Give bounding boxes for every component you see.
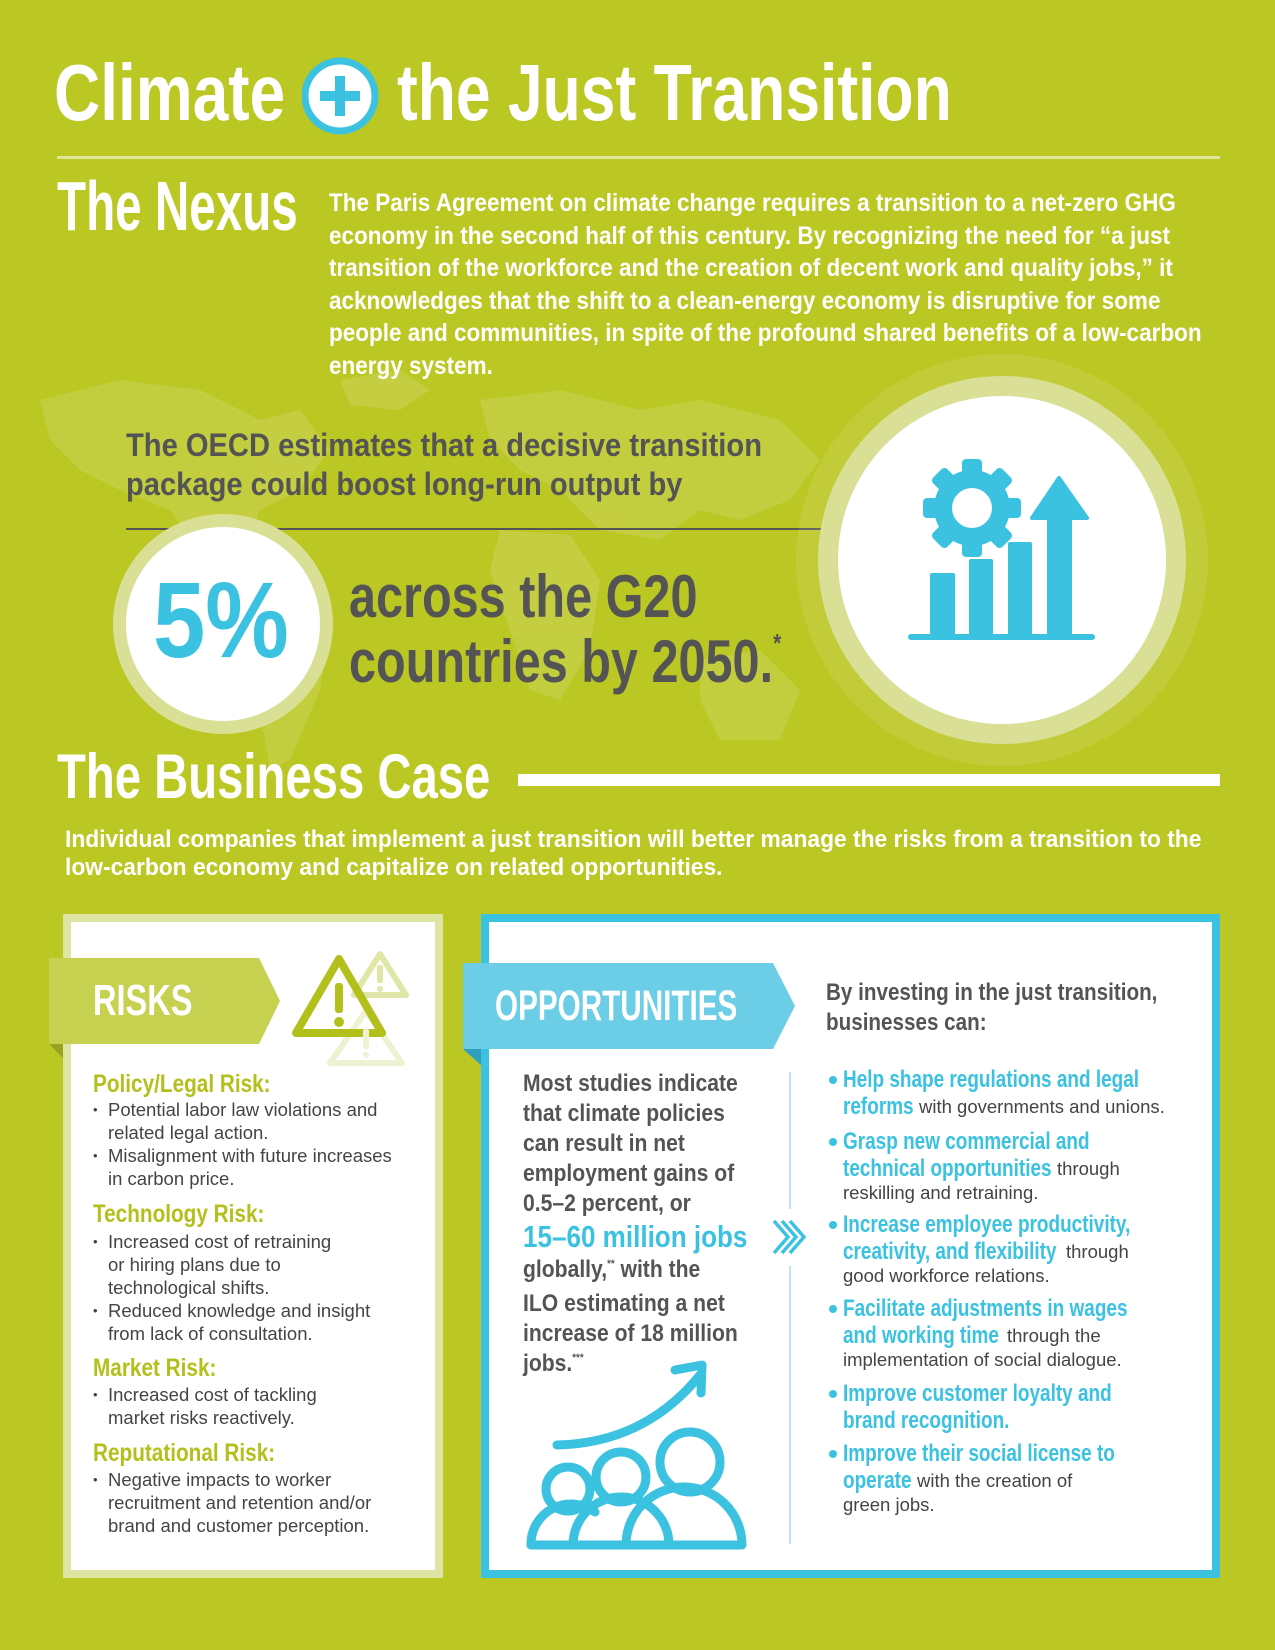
risk: technology: from lack of consultation. <box>108 1323 313 1344</box>
title: Climate <box>54 48 285 137</box>
item: social license: operate <box>843 1467 911 1494</box>
panel: risks <box>63 914 443 1578</box>
item: social license: green jobs. <box>843 1494 935 1515</box>
text: employment gains: 0.5–2 percent, or <box>523 1190 691 1217</box>
risk: technology <box>93 1200 370 1344</box>
risk: reputational <box>93 1439 371 1536</box>
item: productivity: Increase employee productivity, <box>843 1211 1130 1238</box>
item: productivity: creativity, and flexibility <box>843 1238 1057 1265</box>
item: regulations: reforms <box>843 1093 914 1120</box>
item: commercial: through <box>1057 1158 1120 1179</box>
text: employment gains: that climate policies <box>523 1100 725 1127</box>
item: commercial: technical opportunities <box>843 1155 1052 1182</box>
text: nexus paragraph: The Paris Agreement on climate change requires a transition to a net-zero GHG <box>329 189 1176 217</box>
item: wages <box>829 1295 1127 1370</box>
banner: RISKS: RISKS <box>93 976 193 1025</box>
text: business case intro <box>65 826 1201 881</box>
item: commercial <box>829 1128 1120 1203</box>
risk: policy/legal: related legal action. <box>108 1122 268 1143</box>
text: business case intro: low-carbon economy and capitalize on related opportunities. <box>65 854 723 881</box>
risk: reputational: brand and customer perception. <box>108 1515 369 1536</box>
item: productivity: through <box>1066 1241 1129 1262</box>
risk: market: market risks reactively. <box>108 1407 295 1428</box>
risk: market: Market Risk: <box>93 1354 216 1382</box>
risk: technology: technological shifts. <box>108 1277 269 1298</box>
text: OECD estimate: The OECD estimates that a decisive transition <box>126 427 762 463</box>
item: commercial: Grasp new commercial and <box>843 1128 1090 1155</box>
text: nexus paragraph: energy system. <box>329 352 493 380</box>
item: social license <box>829 1440 1115 1515</box>
risk: policy/legal <box>93 1070 392 1189</box>
risk: policy/legal: Potential labor law violations and <box>108 1099 377 1120</box>
item: loyalty <box>829 1380 1112 1434</box>
risk: market <box>93 1354 317 1428</box>
risk: reputational: Negative impacts to worker <box>108 1469 331 1490</box>
icon: warning triangles <box>292 951 409 1066</box>
text: nexus paragraph: acknowledges that the shift to a clean-energy economy is disruptive for some <box>329 287 1160 315</box>
item: commercial: reskilling and retraining. <box>843 1182 1038 1203</box>
text: nexus paragraph <box>329 189 1202 380</box>
stat text: across the G20: across the G20 <box>349 563 697 630</box>
item: loyalty: brand recognition. <box>843 1407 1009 1434</box>
item: productivity <box>829 1211 1130 1286</box>
stat: 5% circle <box>113 514 333 734</box>
text: employment gains <box>522 1070 747 1377</box>
text: employment gains: jobs.*** <box>523 1350 584 1377</box>
icon: chevrons <box>772 1220 806 1254</box>
item: regulations: Help shape regulations and legal <box>843 1066 1139 1093</box>
item: regulations: with governments and unions. <box>919 1096 1165 1117</box>
item: social license: Improve their social license to <box>843 1440 1115 1467</box>
title: the Just Transition <box>397 48 952 137</box>
text: by investing: By investing in the just transition, <box>826 979 1157 1006</box>
text: OECD estimate: package could boost long-run output by <box>126 466 682 502</box>
text: nexus paragraph: economy in the second half of this century. By recognizing the need for “a just <box>329 222 1170 250</box>
stat text: across the G20: countries by 2050.* <box>349 628 781 695</box>
item: wages: and working time <box>843 1322 999 1349</box>
icon: people with rising arrow <box>526 1360 746 1550</box>
panel: opportunities <box>481 914 1220 1578</box>
risk: market: Increased cost of tackling <box>108 1384 317 1405</box>
text: business case intro: Individual companies that implement a just transition will better manage the risks from a transition to the <box>65 826 1201 853</box>
text: by investing <box>826 979 1157 1036</box>
text: nexus paragraph: people and communities, in spite of the profound shared benefits of a low-carbon <box>329 319 1202 347</box>
risk: technology: Increased cost of retraining <box>108 1231 331 1252</box>
risk: reputational: recruitment and retention and/or <box>108 1492 371 1513</box>
world map background <box>40 370 820 766</box>
icon: gear and growth chart circle <box>796 354 1208 766</box>
risk: technology: Technology Risk: <box>93 1200 264 1228</box>
text: employment gains: 15–60 million jobs <box>523 1219 747 1254</box>
text: OECD estimate <box>126 427 762 502</box>
risk: technology: or hiring plans due to <box>108 1254 281 1275</box>
risk: reputational: Reputational Risk: <box>93 1439 275 1467</box>
risk: policy/legal: Misalignment with future increases <box>108 1145 392 1166</box>
text: by investing: businesses can: <box>826 1009 987 1036</box>
text: nexus paragraph: transition of the workforce and the creation of decent work and quality jobs,” it <box>329 254 1173 282</box>
text: employment gains: employment gains of <box>523 1160 734 1187</box>
risk: policy/legal: in carbon price. <box>108 1168 234 1189</box>
risk: technology: Reduced knowledge and insight <box>108 1300 370 1321</box>
banner: OPPORTUNITIES <box>463 963 795 1065</box>
text: employment gains: increase of 18 million <box>523 1320 738 1347</box>
text: employment gains: Most studies indicate <box>523 1070 738 1097</box>
title <box>54 48 952 137</box>
item: loyalty: Improve customer loyalty and <box>843 1380 1112 1407</box>
item: wages: Facilitate adjustments in wages <box>843 1295 1127 1322</box>
heading: The Business Case: The Business Case <box>57 742 490 812</box>
list: opportunities <box>829 1066 1165 1515</box>
item: wages: through the <box>1007 1325 1101 1346</box>
stat text: across the G20 <box>349 563 782 695</box>
item: wages: implementation of social dialogue. <box>843 1349 1122 1370</box>
text: employment gains: ILO estimating a net <box>523 1290 725 1317</box>
heading: The Nexus: The Nexus <box>57 167 298 245</box>
item: social license: with the creation of <box>917 1470 1072 1491</box>
item: productivity: good workforce relations. <box>843 1265 1050 1286</box>
risk: policy/legal: Policy/Legal Risk: <box>93 1070 271 1098</box>
banner: RISKS <box>49 958 280 1058</box>
text: employment gains: globally,** with the <box>523 1256 700 1283</box>
stat: 5% circle: 5% <box>153 559 289 680</box>
text: employment gains: can result in net <box>523 1130 685 1157</box>
banner: OPPORTUNITIES: OPPORTUNITIES <box>495 982 737 1030</box>
item: regulations <box>829 1066 1165 1120</box>
icon: plus circle <box>302 58 378 134</box>
